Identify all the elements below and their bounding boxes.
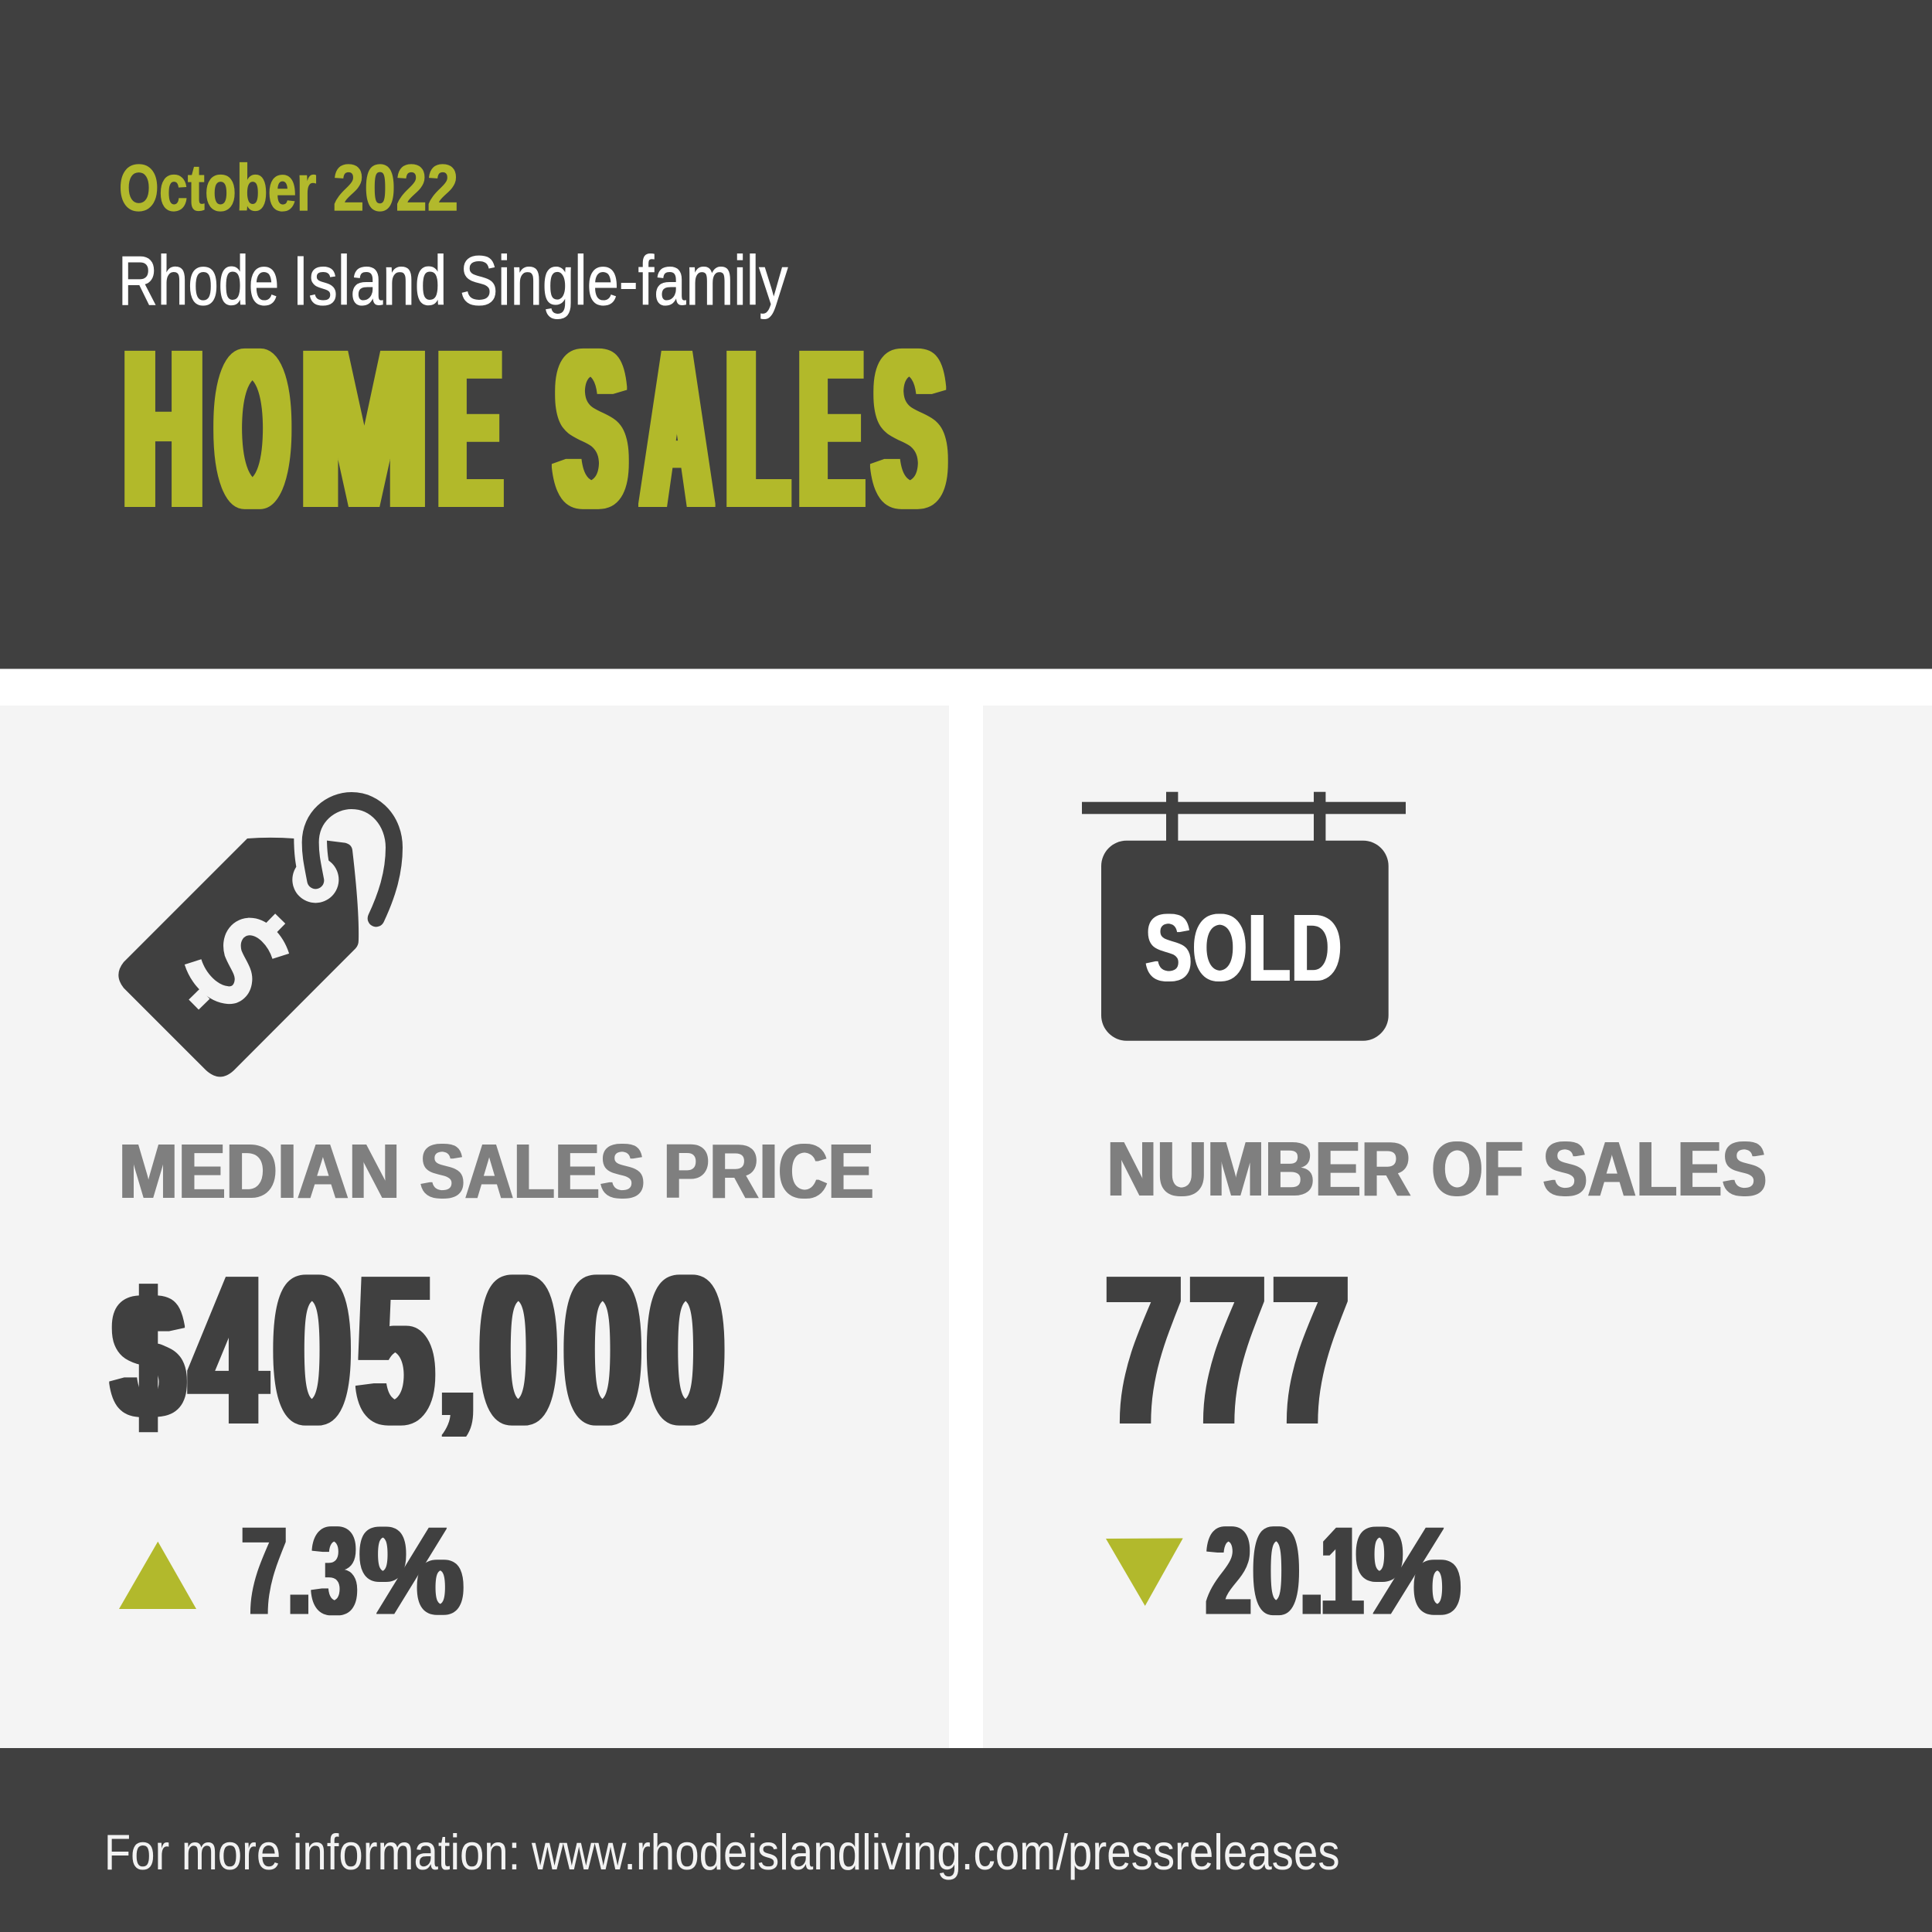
title: A: [644, 304, 710, 553]
metric label: SALES: [420, 1128, 645, 1215]
title: E: [440, 304, 499, 553]
panel: median sales price: [0, 706, 949, 1748]
icon: down triangle: [1106, 1538, 1183, 1606]
title: S: [556, 304, 625, 553]
icon: sold sign: [1082, 792, 1406, 1041]
metric value: 0: [648, 1232, 724, 1468]
metric value: 5: [357, 1232, 433, 1468]
panel: number of sales: [983, 706, 1932, 1748]
sign text: SOLD: [1145, 895, 1342, 1002]
panel: header: S: [875, 304, 944, 553]
metric label: NUMBER: [1107, 1126, 1411, 1213]
subtitle: Rhode: [118, 243, 279, 320]
metric value: $: [114, 1256, 182, 1457]
change value: %: [360, 1502, 464, 1641]
date heading: 2022: [333, 151, 458, 224]
title: M: [301, 304, 427, 553]
metric label: OF: [1431, 1126, 1523, 1213]
icon: price tag: [118, 801, 394, 1077]
metric label: PRICE: [663, 1128, 874, 1215]
change value: 7: [242, 1502, 286, 1641]
title: E: [801, 304, 861, 553]
metric value: 4: [192, 1232, 266, 1468]
metric label: SALES: [1543, 1126, 1767, 1213]
change value: 0: [1253, 1502, 1299, 1641]
change value: 2: [1206, 1502, 1250, 1641]
metric value: 7: [1190, 1232, 1264, 1468]
subtitle: Island: [292, 243, 447, 320]
panel: footer: [0, 1748, 1932, 1932]
change value: .: [1300, 1502, 1324, 1641]
metric value: 0: [274, 1232, 350, 1468]
change value: 3: [312, 1502, 357, 1641]
change value: %: [1356, 1502, 1461, 1641]
date heading: October: [119, 151, 317, 224]
subtitle: Single-family: [460, 243, 787, 320]
source note: www.rhodeislandliving.com/pressreleases: [531, 1824, 1340, 1880]
title: O: [217, 304, 287, 553]
metric label: MEDIAN: [119, 1128, 400, 1215]
change value: 1: [1321, 1502, 1363, 1641]
metric value: ,: [439, 1288, 476, 1444]
icon: up triangle: [119, 1542, 196, 1609]
panel: header: [0, 0, 1932, 669]
title: H: [125, 304, 202, 553]
change value: .: [287, 1502, 311, 1641]
source note: For more information:: [104, 1824, 520, 1880]
metric value: 7: [1107, 1232, 1180, 1468]
title: L: [728, 304, 787, 553]
metric value: 7: [1274, 1232, 1347, 1468]
metric value: 0: [480, 1232, 556, 1468]
metric value: 0: [564, 1232, 641, 1468]
